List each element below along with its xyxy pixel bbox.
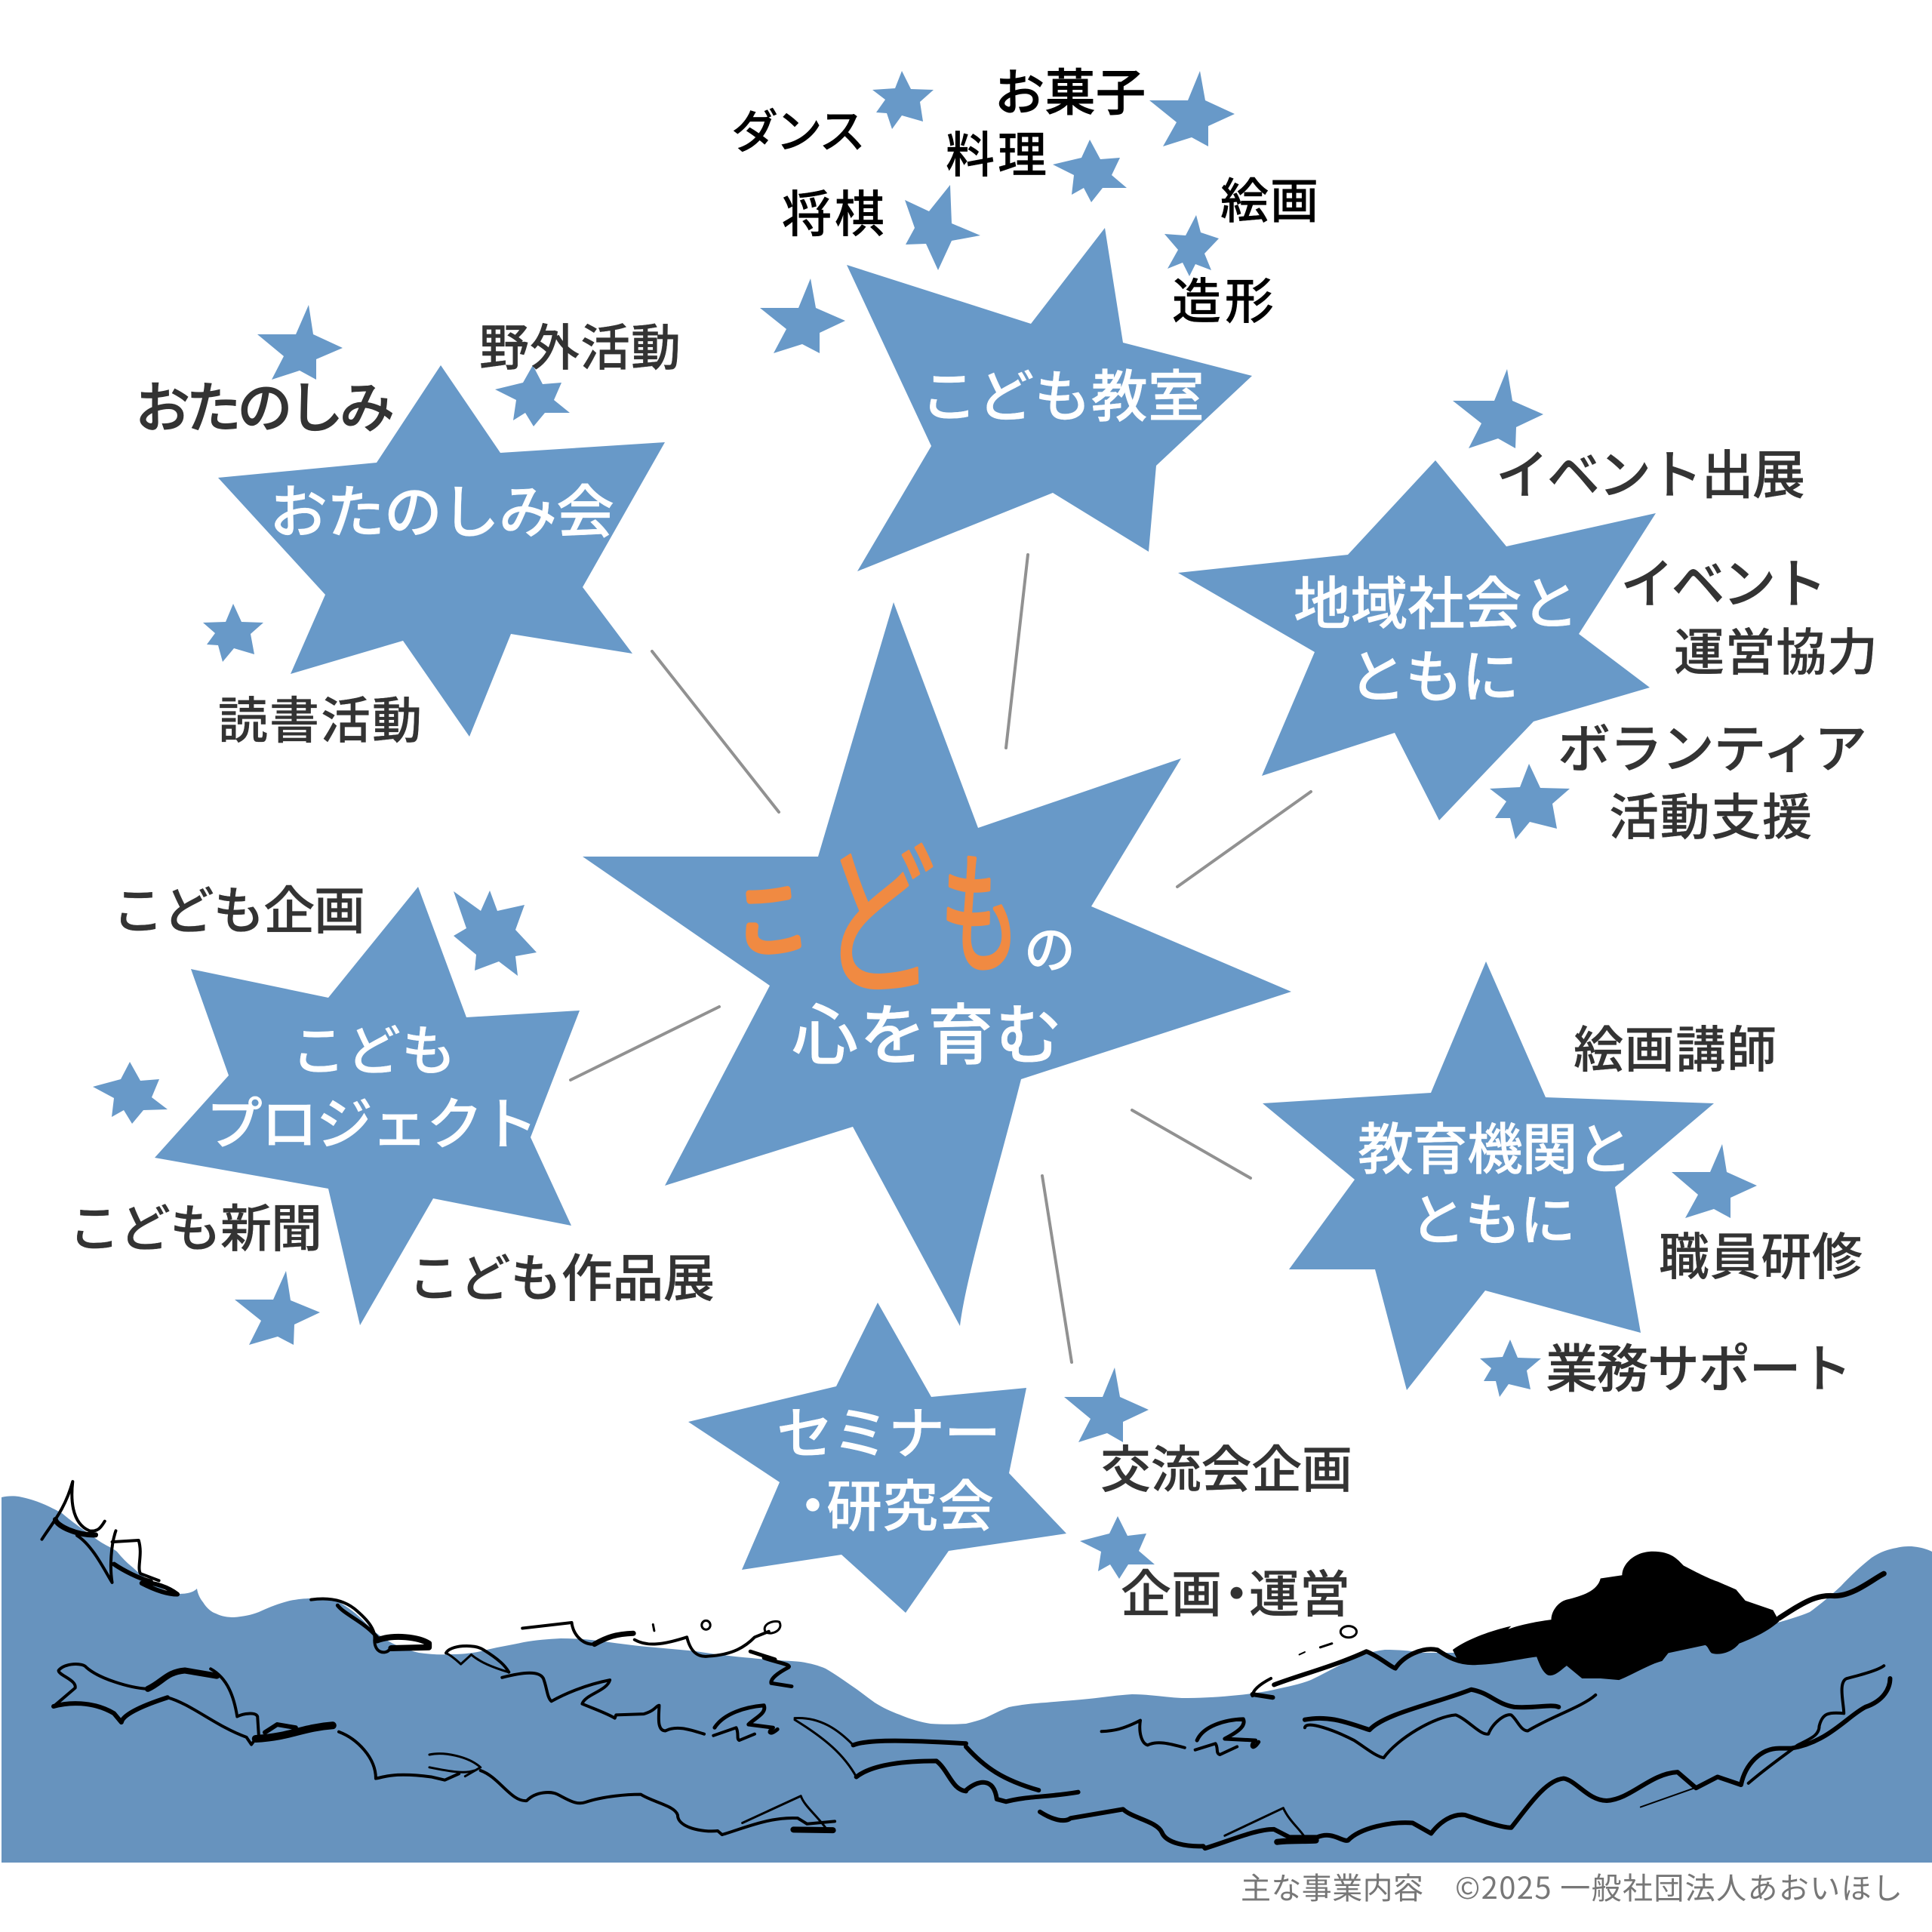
small star: [495, 365, 570, 426]
panel: center star: [583, 602, 1291, 1326]
label: 料理: [946, 115, 1047, 186]
small star: [93, 1062, 168, 1124]
label: イベント出展: [1496, 433, 1805, 509]
small star: [257, 305, 343, 380]
label: こども企画: [112, 869, 365, 944]
label: 造形: [1172, 262, 1274, 333]
heading: こども教室: [921, 351, 1204, 433]
label: 交流会企画: [1100, 1429, 1352, 1503]
label: お菓子: [995, 53, 1146, 125]
title: 心を育む: 心を育む: [792, 983, 1062, 1078]
label: 将棋: [782, 174, 884, 247]
label: こども新聞: [69, 1187, 322, 1262]
black rock silhouette: [1453, 1552, 1780, 1680]
panel: 教育機関とともに: [1263, 961, 1863, 1402]
star: [1263, 961, 1714, 1390]
label: 職員研修: [1659, 1217, 1863, 1290]
label: こども作品展: [408, 1237, 715, 1312]
label: ボランティア: [1558, 707, 1867, 783]
small star: [1149, 71, 1235, 146]
panel: こどもプロジェクト: [69, 869, 715, 1345]
star: [1178, 460, 1656, 820]
label: 野外活動: [479, 308, 681, 380]
label: 活動支援: [1609, 777, 1812, 850]
star: [218, 365, 665, 737]
black ink strokes and rock: right half of waves: [966, 1552, 1890, 1848]
label: ・: [1211, 1554, 1262, 1627]
title: こども: も: [940, 809, 1020, 1001]
heading line 2: ともに: [1349, 631, 1519, 714]
small star: [454, 891, 537, 976]
panel: こども教室: [731, 53, 1318, 571]
label: イベント: [1620, 542, 1827, 619]
heading: おたのしみ会: [269, 466, 614, 550]
small star: [905, 185, 980, 270]
footer credit: 主な事業内容: [1241, 1864, 1423, 1908]
label: ダンス: [731, 94, 866, 162]
label: 業務サポート: [1546, 1327, 1852, 1402]
connector lines: [571, 555, 1311, 1362]
panel: 地域社会とともに: [1178, 369, 1878, 850]
small star: [203, 604, 263, 662]
small star: [235, 1271, 320, 1345]
heading line 1: 地域社会と: [1294, 558, 1579, 641]
heading line 1: 教育機関と: [1358, 1105, 1632, 1186]
title: こども: ど: [815, 786, 941, 1032]
label: 運営協力: [1674, 612, 1878, 685]
small star: [1490, 764, 1570, 839]
star: [155, 887, 580, 1325]
heading line 2: ・: [785, 1462, 841, 1543]
footer credit: [1241, 1864, 1903, 1908]
small star: [872, 71, 934, 129]
footer credit: ©2025 一般社団法人あおいほし: [1455, 1864, 1903, 1908]
label: 読書活動: [218, 681, 422, 753]
title: の: の: [1024, 909, 1075, 983]
wave background: [2, 1496, 1932, 1863]
label: 企画: [1121, 1554, 1222, 1627]
heading line 2: 研究会: [826, 1462, 994, 1543]
small star: [760, 278, 845, 353]
small star: [1053, 140, 1127, 202]
black ink strokes: left half of waves: [42, 1481, 966, 1835]
heading line 2: ともに: [1410, 1176, 1576, 1257]
heading line 2: プロジェクト: [206, 1078, 538, 1161]
label: 絵画講師: [1574, 1010, 1777, 1082]
star: [847, 228, 1252, 571]
small star: [1672, 1144, 1757, 1218]
heading line 1: こども: [291, 1007, 456, 1086]
small star: [1480, 1340, 1541, 1397]
small star: [1064, 1367, 1149, 1442]
panel: セミナー・研究会: [688, 1303, 1352, 1627]
label: 運営: [1249, 1554, 1350, 1627]
label: 絵画: [1220, 163, 1318, 232]
panel: おたのしみ会: [135, 305, 681, 753]
small star: [1164, 215, 1219, 276]
title: こども: [728, 786, 1020, 1032]
center star body: [583, 602, 1291, 1326]
small star: [1453, 369, 1543, 448]
star: [688, 1303, 1066, 1613]
small star: [1080, 1516, 1155, 1579]
label: おたのしみ: [135, 364, 395, 444]
title: こども: こ: [728, 851, 813, 977]
heading line 1: セミナー: [777, 1388, 1001, 1470]
